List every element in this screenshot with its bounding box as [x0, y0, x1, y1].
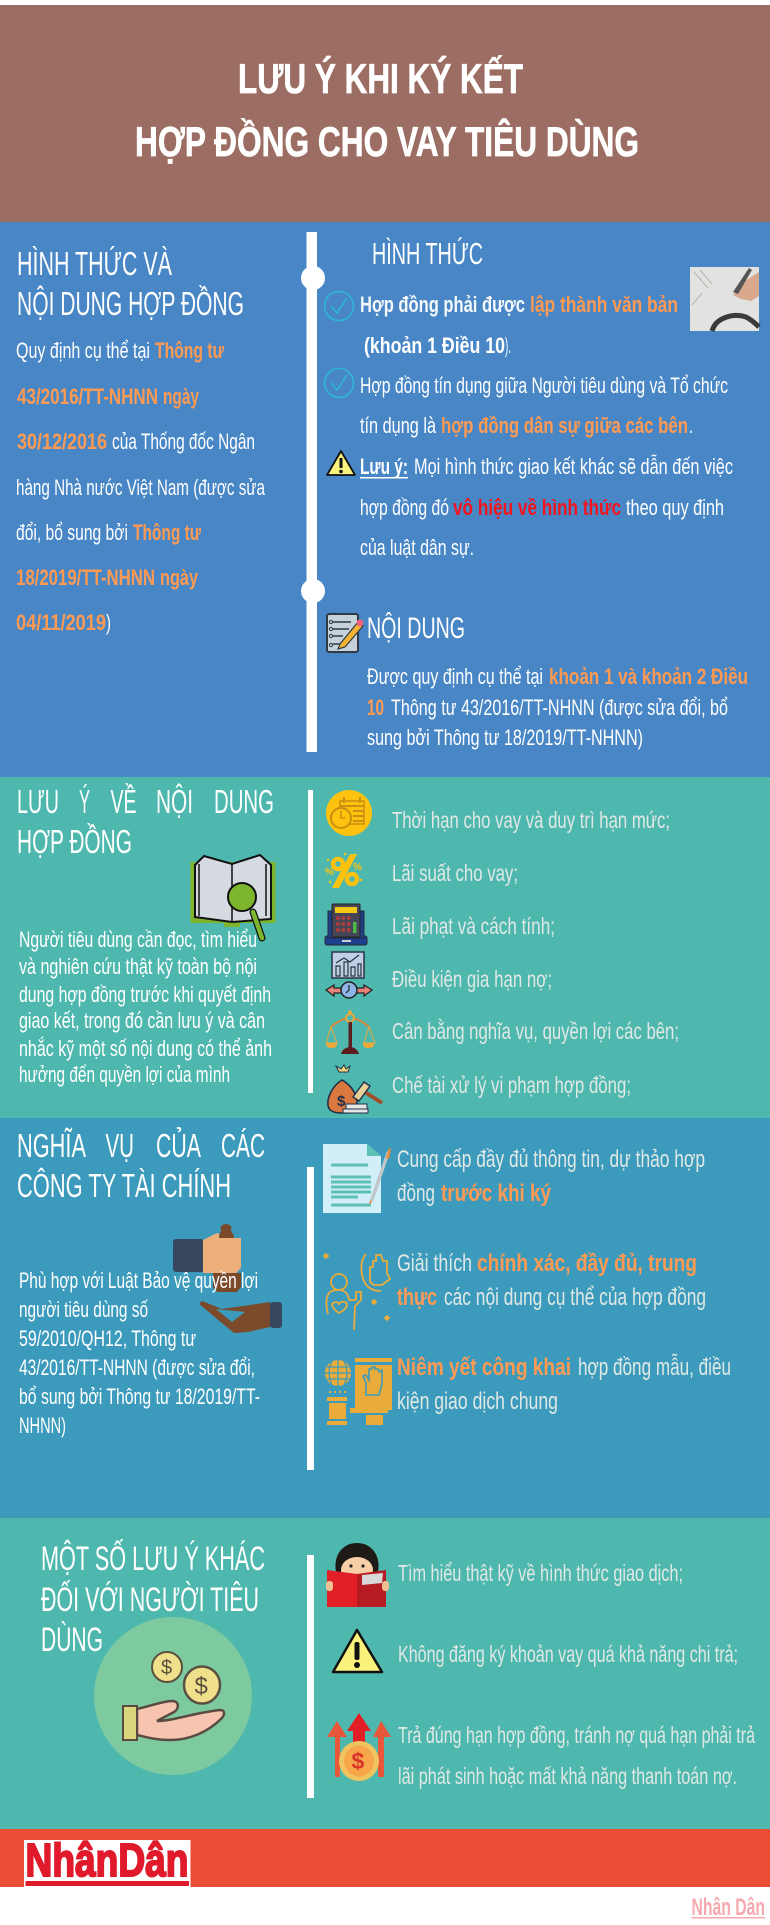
heading: một số lưu ý khác: [41, 1539, 265, 1659]
icon: check 1: [324, 292, 354, 320]
heading: hình thức và nội dung hợp đồng: HÌNH THỨC VÀ: [17, 245, 172, 282]
icon: percent: %: [325, 867, 334, 878]
heading: lưu ý về nội dung: LƯU: [17, 783, 59, 820]
text: niêm yết công khai: kiện giao dịch chung: [397, 1388, 558, 1415]
text: lưu ý: theo quy định: [626, 495, 724, 520]
heading: lưu ý về nội dung: HỢP ĐỒNG: [17, 823, 132, 860]
icon: extension chart and clock: [326, 952, 372, 998]
heading: nghĩa vụ: [17, 1127, 265, 1204]
divider: [308, 790, 313, 1093]
text: lưu ý: hợp đồng đó: [360, 495, 449, 520]
text block: quy định cụ thể: Quy định cụ thể tại: [16, 338, 150, 363]
text block: quy định cụ thể: đổi, bổ sung bởi: [16, 520, 128, 545]
text: hợp đồng tín dụng: .: [689, 413, 693, 438]
heading: lưu ý về nội dung: [17, 783, 274, 860]
icon: warning: [333, 1630, 382, 1672]
header panel: [0, 5, 770, 222]
text block: quy định cụ thể: ): [106, 610, 111, 635]
text block: người tiêu dùng cần đọc: nhắc kỹ một số nội dung có thể ảnh: [19, 1036, 272, 1061]
text: cung cấp thông tin: đồng: [397, 1180, 435, 1207]
panel: hình thức và nội dung: [0, 222, 770, 777]
text: niêm yết công khai: [397, 1354, 731, 1415]
text block: phù hợp với luật: người tiêu dùng số: [19, 1297, 148, 1322]
text: lưu ý: [360, 454, 733, 560]
list: điều cần lưu ý: [392, 807, 679, 1098]
text block: phù hợp với luật: Phù hợp với Luật Bảo vệ quyền lợi: [19, 1268, 258, 1293]
text: được quy định: Được quy định cụ thể tại: [367, 664, 543, 689]
divider: [307, 1167, 314, 1470]
list: điều cần lưu ý: Thời hạn cho vay và duy trì hạn mức;: [392, 807, 670, 833]
text: hợp đồng tín dụng: hợp đồng dân sự giữa các bên: [441, 413, 688, 438]
icon: document and pen: [323, 1144, 391, 1213]
text block: phù hợp với luật: bổ sung bởi Thông tư 18/2019/TT-: [19, 1384, 260, 1409]
icon: coin with rising arrows: [327, 1713, 391, 1781]
icon: person reading: [326, 1543, 389, 1607]
text: lập thành văn bản: Hợp đồng phải được: [360, 292, 525, 317]
text: lưu ý: của luật dân sự.: [360, 535, 474, 560]
text: lưu ý: vô hiệu về hình thức: [453, 495, 621, 520]
heading: nghĩa vụ: NGHĨA: [17, 1127, 86, 1164]
text block: người tiêu dùng cần đọc: giao kết, trong đó cần lưu ý và cân: [19, 1008, 265, 1033]
text block: người tiêu dùng cần đọc: dung hợp đồng trước khi quyết định: [19, 982, 271, 1007]
heading: hình thức và nội dung hợp đồng: [17, 245, 244, 322]
heading: hình thức: HÌNH THỨC: [372, 236, 483, 271]
heading: lưu ý về nội dung: Ý: [79, 783, 90, 820]
heading: nội dung: NỘI DUNG: [367, 611, 465, 645]
icon: open book and magnifier: [190, 855, 276, 938]
list: điều cần lưu ý: Lãi suất cho vay;: [392, 860, 518, 886]
text block: quy định cụ thể: ngày: [163, 384, 200, 409]
heading: một số lưu ý khác: DÙNG: [41, 1621, 103, 1659]
icon: hand signing photo: [690, 267, 759, 331]
text: lập thành văn bản: [360, 292, 678, 358]
text block: quy định cụ thể: [16, 338, 266, 635]
icon: percent: [325, 853, 362, 888]
list: điều cần lưu ý: Điều kiện gia hạn nợ;: [392, 966, 552, 992]
icon: coin with rising arrows: $: [352, 1748, 364, 1774]
heading: nghĩa vụ: CỦA: [156, 1127, 201, 1164]
text: giải thích: Giải thích: [397, 1250, 472, 1277]
text block: quy định cụ thể: 43/2016/TT-NHNN: [17, 384, 158, 409]
text: lập thành văn bản: ).: [505, 333, 511, 358]
icon: calculator: [325, 904, 367, 945]
icon: calendar clock: [326, 790, 372, 836]
text: giải thích: chính xác, đầy đủ, trung: [477, 1250, 697, 1277]
icon: money bag and gavel: [328, 1065, 382, 1113]
text block: phù hợp với luật: 43/2016/TT-NHNN (được sửa đổi,: [19, 1355, 255, 1380]
icon: balance scale: [326, 1010, 375, 1054]
text: lập thành văn bản: lập thành văn bản: [530, 292, 678, 317]
title: LƯU Ý KHI KÝ KẾT: [238, 55, 523, 102]
text block: phù hợp với luật: NHNN): [19, 1413, 66, 1438]
text: được quy định: [367, 664, 748, 750]
icon: notepad and pencil: [327, 614, 364, 652]
list: điều cần lưu ý: Chế tài xử lý vi phạm hợp đồng;: [392, 1072, 631, 1098]
text block: quy định cụ thể: Thông tư: [133, 520, 201, 545]
icon: percent: %: [353, 862, 362, 873]
panel: một số lưu ý khác: [0, 1518, 770, 1829]
heading: nghĩa vụ: VỤ: [106, 1127, 134, 1164]
text block: quy định cụ thể: hàng Nhà nước Việt Nam (được sửa: [16, 475, 266, 500]
heading: lưu ý về nội dung: VỀ: [110, 783, 136, 820]
heading: một số lưu ý khác: MỘT SỐ LƯU Ý KHÁC: [41, 1539, 265, 1578]
icon: hands exchange: [173, 1224, 282, 1333]
heading: lưu ý về nội dung: NỘI: [156, 783, 193, 820]
text: lưu ý: Lưu ý:: [360, 454, 408, 479]
heading: lưu ý về nội dung: DUNG: [214, 783, 274, 820]
text block: quy định cụ thể: của Thống đốc Ngân: [112, 429, 255, 454]
icon: hand with coins: [94, 1617, 252, 1775]
text: trả đúng hạn: [398, 1722, 755, 1789]
icon: warning small: [327, 451, 355, 475]
icon: hand with coins: $: [161, 1657, 172, 1679]
list: điều cần lưu ý: Lãi phạt và cách tính;: [392, 913, 555, 939]
heading: một số lưu ý khác: ĐỐI VỚI NGƯỜI TIÊU: [41, 1580, 259, 1619]
text block: quy định cụ thể: 18/2019/TT-NHNN: [16, 565, 155, 590]
text: cung cấp thông tin: trước khi ký: [441, 1180, 552, 1207]
divider: [307, 1555, 314, 1798]
heading: nghĩa vụ: CÁC: [221, 1127, 265, 1164]
icon: hand with coins: $: [194, 1673, 208, 1700]
icon: person oath: [324, 1254, 390, 1330]
text block: quy định cụ thể: Thông tư: [155, 338, 224, 363]
text block: quy định cụ thể: ngày: [160, 565, 199, 590]
title: [135, 55, 639, 165]
text: giải thích: [397, 1250, 706, 1311]
text block: quy định cụ thể: 30/12/2016: [17, 429, 107, 454]
text block: người tiêu dùng cần đọc: hưởng đến quyền lợi của mình: [19, 1062, 230, 1087]
timeline: [301, 232, 325, 752]
footer band: [0, 1829, 770, 1887]
text: được quy định: sung bởi Thông tư 18/2019/TT-NHNN): [367, 725, 643, 750]
heading: nghĩa vụ: CÔNG TY TÀI CHÍNH: [17, 1167, 231, 1204]
text: niêm yết công khai: Niêm yết công khai: [397, 1354, 571, 1381]
text: lập thành văn bản: (khoản 1 Điều 10: [364, 333, 505, 358]
text block: người tiêu dùng cần đọc: và nghiên cứu thật kỹ toàn bộ nội: [19, 954, 257, 979]
heading: hình thức và nội dung hợp đồng: NỘI DUNG HỢP ĐỒNG: [17, 285, 244, 322]
logo: Nhân Dân: NhânDân: [26, 1834, 188, 1886]
panel: lưu ý về nội dung hợp đồng: [0, 777, 770, 1118]
panel: nghĩa vụ của các công ty tài chính: [0, 1118, 770, 1518]
text: hợp đồng tín dụng: [360, 373, 728, 438]
text block: người tiêu dùng cần đọc: [19, 927, 272, 1087]
text: giải thích: thực: [397, 1284, 437, 1311]
text: cung cấp thông tin: [397, 1146, 705, 1207]
text block: người tiêu dùng cần đọc: Người tiêu dùng cần đọc, tìm hiểu: [19, 927, 257, 952]
text block: quy định cụ thể: 04/11/2019: [16, 610, 106, 635]
text: hợp đồng tín dụng: tín dụng là: [360, 413, 437, 438]
text block: phù hợp với luật: 59/2010/QH12, Thông tư: [19, 1326, 196, 1351]
icon: public notice globe and gavel: [325, 1358, 392, 1425]
icon: check 2: [324, 368, 354, 398]
text: được quy định: 10: [367, 695, 384, 720]
text block: phù hợp với luật: [19, 1268, 260, 1438]
icon: money bag and gavel: $: [337, 1093, 346, 1110]
